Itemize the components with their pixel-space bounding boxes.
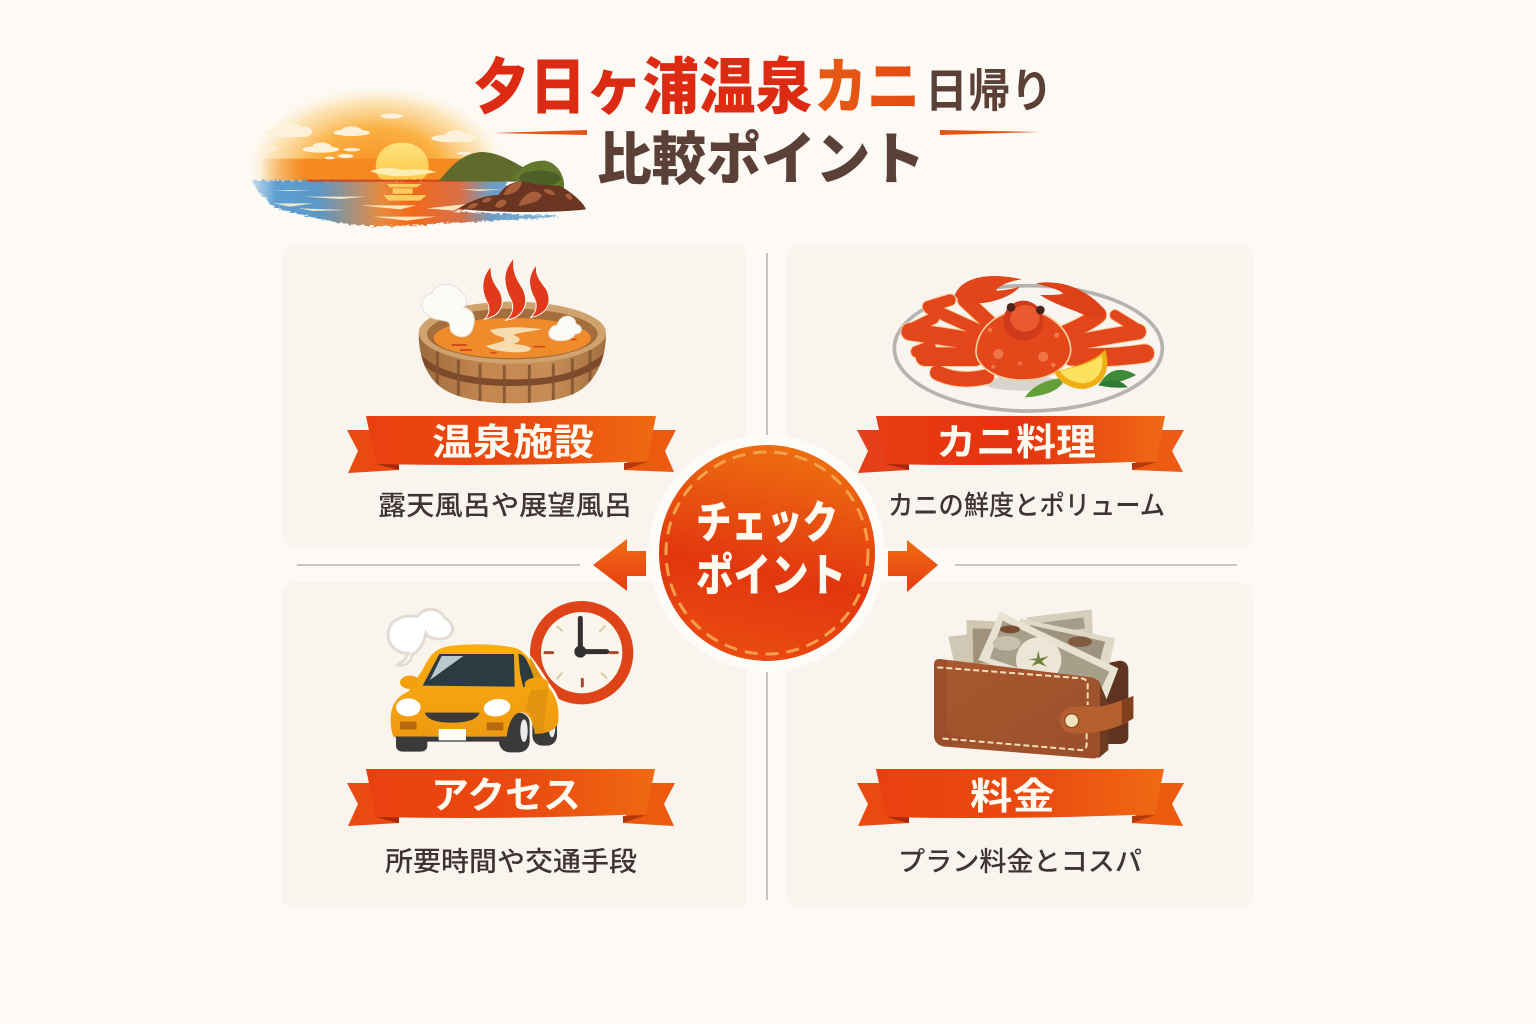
headlights	[396, 698, 421, 716]
divider lines	[297, 253, 1237, 900]
title accent left	[493, 130, 587, 135]
ribbon: crab cuisine	[857, 416, 1184, 473]
mirrors	[400, 676, 420, 689]
near rock	[458, 181, 586, 212]
stitching	[937, 667, 1088, 750]
wallet body	[934, 659, 1100, 758]
clock	[530, 601, 633, 704]
sea	[252, 180, 560, 226]
panel: access	[281, 582, 747, 909]
title line 1: place name: 夕日ヶ浦温泉	[473, 53, 812, 121]
center badge: check point: ポイント	[696, 550, 846, 601]
back of wallet	[1097, 661, 1128, 744]
steam clouds	[422, 284, 581, 341]
banknotes	[948, 633, 990, 667]
leaves	[1025, 378, 1063, 397]
crab body	[976, 310, 1071, 380]
ribbon: hot spring facilities	[347, 416, 676, 473]
grille	[425, 713, 480, 723]
panel: crab cuisine	[786, 244, 1253, 548]
side window	[518, 654, 534, 687]
description: カニの鮮度とポリューム	[888, 491, 1165, 521]
crab claws	[955, 276, 1022, 303]
ribbon label: アクセス	[431, 775, 581, 816]
title accent right	[940, 130, 1039, 135]
number plate	[439, 729, 466, 740]
card background	[281, 582, 747, 909]
clouds	[257, 113, 475, 159]
car body	[391, 644, 559, 737]
car outline	[517, 648, 559, 722]
description: 露天風呂や展望風呂	[378, 491, 632, 521]
horizon line	[307, 180, 467, 182]
ribbon: price	[857, 769, 1184, 826]
ribbon label: 料金	[970, 776, 1055, 817]
sun reflection and sea highlights	[273, 184, 503, 221]
snap button	[1065, 714, 1079, 728]
arrow: right	[888, 540, 938, 592]
card background	[786, 582, 1253, 909]
wheels	[396, 733, 427, 752]
near island foliage	[512, 161, 564, 188]
wallet inner pages	[1098, 680, 1108, 758]
banknote portrait and medallion	[1000, 625, 1020, 633]
card background	[281, 244, 747, 548]
title line 1: day trip: 日帰り	[925, 65, 1053, 117]
far island	[439, 152, 527, 182]
icon: wooden hot spring tub	[419, 259, 606, 404]
center badge: check point	[649, 435, 885, 671]
icon: crab on a plate	[894, 276, 1162, 411]
badge text: チェック	[696, 497, 838, 548]
description: 所要時間や交通手段	[385, 847, 637, 877]
fog lamps	[400, 722, 417, 730]
rock highlights	[467, 182, 572, 209]
title line 2: 比較ポイント	[597, 128, 925, 192]
illustration: sunset over the sea with rocky islands	[245, 85, 586, 255]
steam flames	[483, 259, 549, 319]
sky band at horizon	[260, 159, 480, 181]
card background	[786, 244, 1253, 548]
panel: hot spring facilities	[347, 260, 676, 518]
windshield	[423, 654, 515, 687]
title line 1: kani: カニ	[814, 54, 920, 121]
icon: car with clock and exhaust cloud	[388, 601, 633, 752]
title	[473, 53, 1053, 192]
arrow: left	[593, 539, 646, 591]
ribbon: access	[347, 769, 675, 826]
strap	[1060, 696, 1133, 733]
lemon	[1054, 349, 1107, 389]
icon: leather wallet with banknotes	[934, 609, 1133, 758]
description: プラン料金とコスパ	[898, 847, 1142, 877]
exhaust cloud	[388, 609, 452, 665]
panel: price	[786, 582, 1253, 909]
ribbon label: 温泉施設	[432, 422, 594, 463]
sky glow	[250, 87, 502, 181]
ribbon label: カニ料理	[936, 422, 1096, 463]
sun	[376, 143, 429, 180]
crab legs	[909, 300, 1145, 379]
